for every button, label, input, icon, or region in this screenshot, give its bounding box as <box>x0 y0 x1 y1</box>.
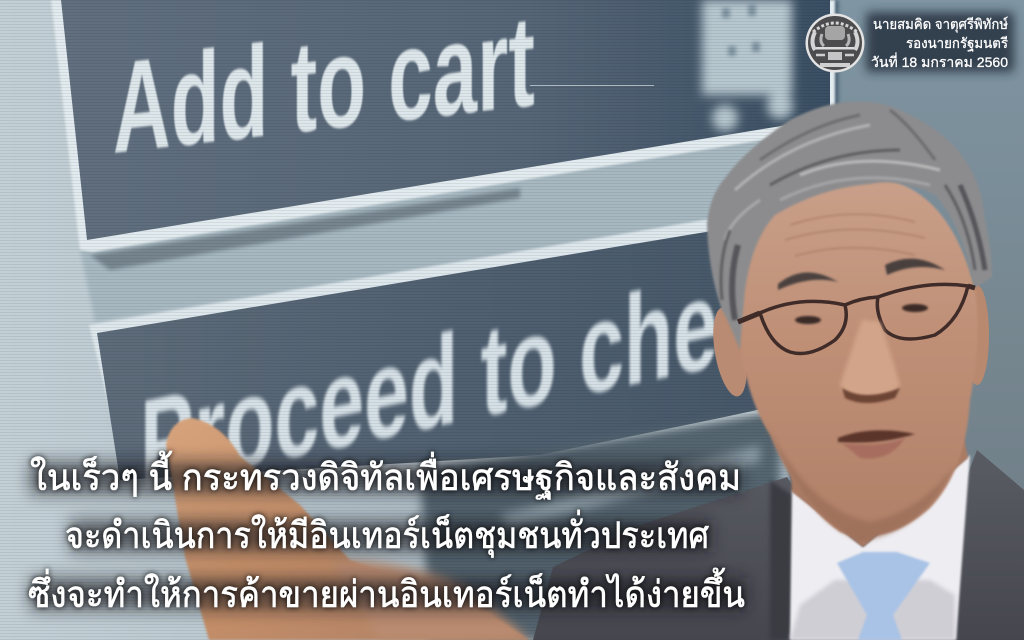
icon: government seal <box>806 14 864 72</box>
headline text block <box>28 450 745 615</box>
date: วันที่ 18 มกราคม 2560 <box>871 53 1008 70</box>
right dim screen area <box>830 0 1024 640</box>
headline line 1: ในเร็วๆ นี้ กระทรวงดิจิทัลเพื่อเศรษฐกิจและสังคม <box>30 450 741 500</box>
dark glow behind headline <box>30 462 745 610</box>
button label: proceed to check: Proceed to chec <box>140 241 763 517</box>
headline line 2: จะดำเนินการให้มีอินเทอร์เน็ตชุมชนทั่วประเทศ <box>65 509 709 558</box>
mouth <box>838 430 915 443</box>
eyebrows <box>778 272 838 290</box>
man: portrait <box>533 102 1024 640</box>
shirt collar <box>790 455 970 640</box>
suit shadow fold <box>770 480 792 640</box>
hand pointing at the button <box>166 418 530 640</box>
button: add to cart <box>51 0 835 252</box>
eyes <box>795 316 821 324</box>
suit jacket <box>533 450 1024 640</box>
face <box>738 178 978 537</box>
necktie <box>837 552 930 640</box>
headline line 3: ซึ่งจะทำให้การค้าขายผ่านอินเทอร์เน็ตทำได้ง่ายขึ้น <box>28 567 745 615</box>
nose <box>840 320 900 398</box>
neck <box>790 420 968 547</box>
glasses <box>738 284 975 354</box>
speaker title: รองนายกรัฐมนตรี <box>906 35 1008 52</box>
forehead wrinkles <box>785 214 925 256</box>
speaker name: นายสมคิด จาตุศรีพิทักษ์ <box>873 16 1008 33</box>
band between the two buttons <box>80 120 850 322</box>
hair strands <box>721 110 985 320</box>
header box: speaker name and date <box>866 12 1014 72</box>
hair <box>707 102 992 350</box>
ears <box>707 305 753 399</box>
icon: shopping cart <box>702 0 793 131</box>
decorative thin rule <box>530 85 654 86</box>
